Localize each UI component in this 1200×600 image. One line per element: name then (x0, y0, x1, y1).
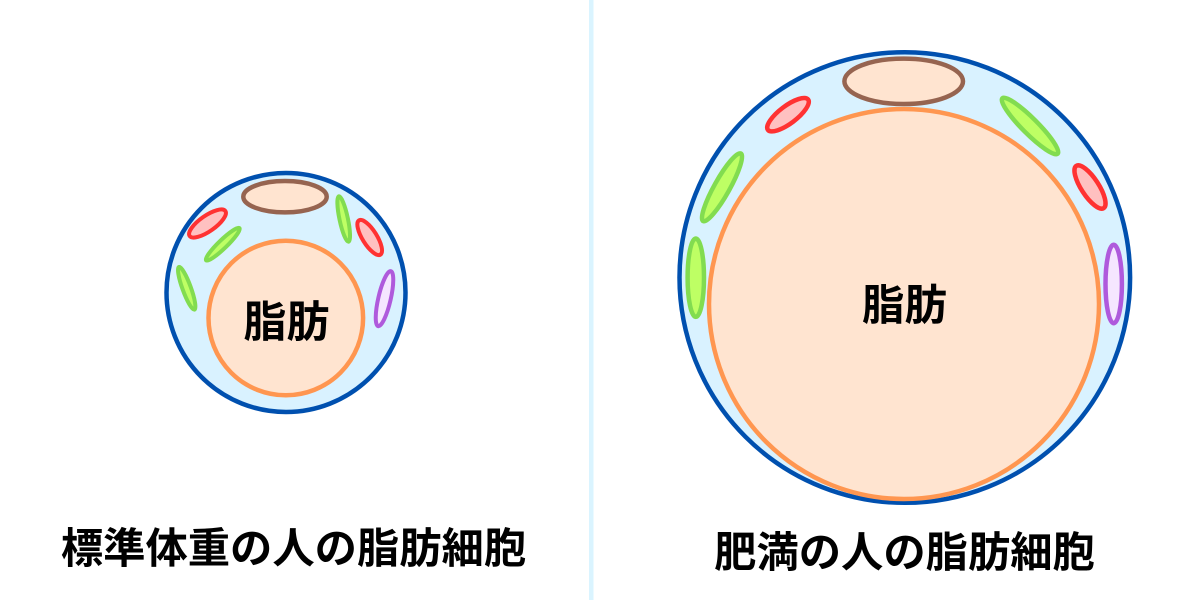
organelle: purple right (372, 270, 397, 328)
caption: obese: 肥満の人の脂肪細胞 (714, 529, 1095, 576)
organelle: red upper left (185, 205, 230, 242)
cell membrane (680, 52, 1130, 503)
cell membrane (166, 173, 406, 412)
divider (589, 0, 594, 600)
organelle: purple right (1106, 245, 1122, 323)
panel: obese fat cell (680, 52, 1130, 503)
organelle: red upper right (353, 217, 387, 258)
organelle: green upper right (335, 195, 353, 243)
organelle: red right (1069, 161, 1111, 213)
organelle: red upper left (763, 93, 813, 137)
panel: normal-weight fat cell (166, 173, 406, 412)
organelle: green upper left (696, 150, 748, 225)
fat droplet (709, 109, 1099, 499)
nucleus (844, 59, 963, 104)
organelle: green upper right (997, 93, 1063, 159)
organelle: green left (175, 266, 198, 311)
label: fat: 脂肪 (862, 283, 947, 330)
nucleus (243, 181, 327, 212)
organelle: green left (688, 239, 704, 317)
label: fat: 脂肪 (244, 299, 330, 347)
fat droplet (208, 241, 363, 395)
caption: normal weight: 標準体重の人の脂肪細胞 (61, 525, 526, 572)
organelle: green upper left (203, 225, 242, 263)
